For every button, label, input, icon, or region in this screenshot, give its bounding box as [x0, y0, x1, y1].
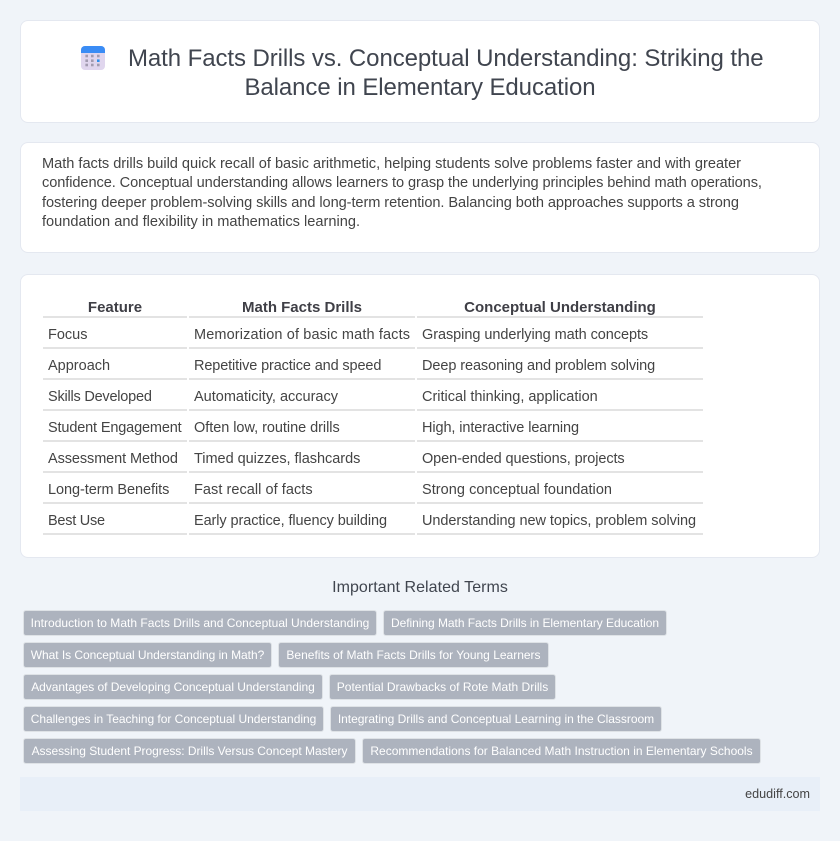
row: Skills Developed: [43, 389, 703, 411]
row: Focus: Grasping underlying math concepts: [422, 327, 648, 343]
footer source label: edudiff.com: [745, 787, 810, 801]
title: [128, 45, 763, 101]
row: Approach: Repetitive practice and speed: [194, 358, 381, 374]
tag: [330, 706, 662, 732]
tag: [329, 674, 556, 700]
text block: introduction paragraph: fostering deeper problem-solving skills and long-term retention. Balancing both approaches supports a strong: [42, 195, 739, 211]
row: Best Use: [43, 513, 703, 535]
row: Assessment Method: Open-ended questions, projects: [422, 451, 625, 467]
tag: [23, 642, 272, 668]
panel: title header: [20, 20, 820, 123]
row: Approach: Deep reasoning and problem solving: [422, 358, 655, 374]
row: Assessment Method: Timed quizzes, flashcards: [194, 451, 360, 467]
row: Best Use: Best Use: [48, 513, 105, 529]
text block: introduction paragraph: [42, 156, 762, 230]
tag: Challenges in Teaching for Conceptual Understanding: [31, 712, 316, 726]
tag: Recommendations for Balanced Math Instruction in Elementary Schools: [370, 744, 753, 758]
title: Math Facts Drills vs. Conceptual Understanding: Striking the: [128, 45, 763, 72]
row: Approach: Approach: [48, 358, 110, 374]
row: Focus: [43, 327, 703, 349]
tag: Advantages of Developing Conceptual Understanding: [31, 680, 315, 694]
tag: [23, 610, 377, 636]
row: Focus: Memorization of basic math facts: [194, 327, 410, 343]
row: Skills Developed: Skills Developed: [48, 389, 152, 405]
footer: [20, 777, 820, 811]
row: Student Engagement: Often low, routine drills: [194, 420, 340, 436]
text block: introduction paragraph: foundation and flexibility in mathematics learning.: [42, 214, 360, 230]
table header row: [43, 299, 703, 318]
row: Long-term Benefits: Fast recall of facts: [194, 482, 313, 498]
tag: Potential Drawbacks of Rote Math Drills: [337, 680, 548, 694]
title: Balance in Elementary Education: [244, 74, 596, 101]
table: feature comparison: [43, 299, 703, 535]
tag: Defining Math Facts Drills in Elementary Education: [391, 616, 659, 630]
row: Approach: [43, 358, 703, 380]
tag: What Is Conceptual Understanding in Math?: [31, 648, 264, 662]
row: Assessment Method: Assessment Method: [48, 451, 178, 467]
table header row: Feature: [88, 299, 142, 316]
table header row: Math Facts Drills: [242, 299, 362, 316]
tag: Introduction to Math Facts Drills and Conceptual Understanding: [31, 616, 369, 630]
tags: related terms: [23, 610, 761, 764]
tag: [278, 642, 549, 668]
panel: introduction: [20, 142, 820, 253]
row: Assessment Method: [43, 451, 703, 473]
tag: [23, 706, 324, 732]
row: Skills Developed: Automaticity, accuracy: [194, 389, 338, 405]
row: Best Use: Understanding new topics, problem solving: [422, 513, 696, 529]
table header row: Conceptual Understanding: [464, 299, 656, 316]
text block: introduction paragraph: Math facts drills build quick recall of basic arithmetic, helping students solve problems faster and with greater: [42, 156, 741, 172]
row: Student Engagement: High, interactive learning: [422, 420, 579, 436]
icon: calculator calendar: [81, 46, 105, 70]
tag: [23, 738, 356, 764]
row: Best Use: Early practice, fluency building: [194, 513, 387, 529]
tag: Integrating Drills and Conceptual Learning in the Classroom: [338, 712, 654, 726]
tag: [362, 738, 761, 764]
row: Long-term Benefits: Strong conceptual foundation: [422, 482, 612, 498]
panel: comparison table: [20, 274, 820, 558]
row: Long-term Benefits: Long-term Benefits: [48, 482, 169, 498]
tag: [383, 610, 667, 636]
row: Long-term Benefits: [43, 482, 703, 504]
row: Student Engagement: Student Engagement: [48, 420, 182, 436]
tag: Benefits of Math Facts Drills for Young Learners: [286, 648, 541, 662]
row: Skills Developed: Critical thinking, application: [422, 389, 598, 405]
heading: related terms: Important Related Terms: [332, 579, 508, 596]
tag: [23, 674, 323, 700]
tag: Assessing Student Progress: Drills Versus Concept Mastery: [32, 744, 347, 758]
row: Student Engagement: [43, 420, 703, 442]
row: Focus: Focus: [48, 327, 88, 343]
text block: introduction paragraph: confidence. Conceptual understanding allows learners to grasp the underlying principles behind math operations,: [42, 175, 762, 191]
